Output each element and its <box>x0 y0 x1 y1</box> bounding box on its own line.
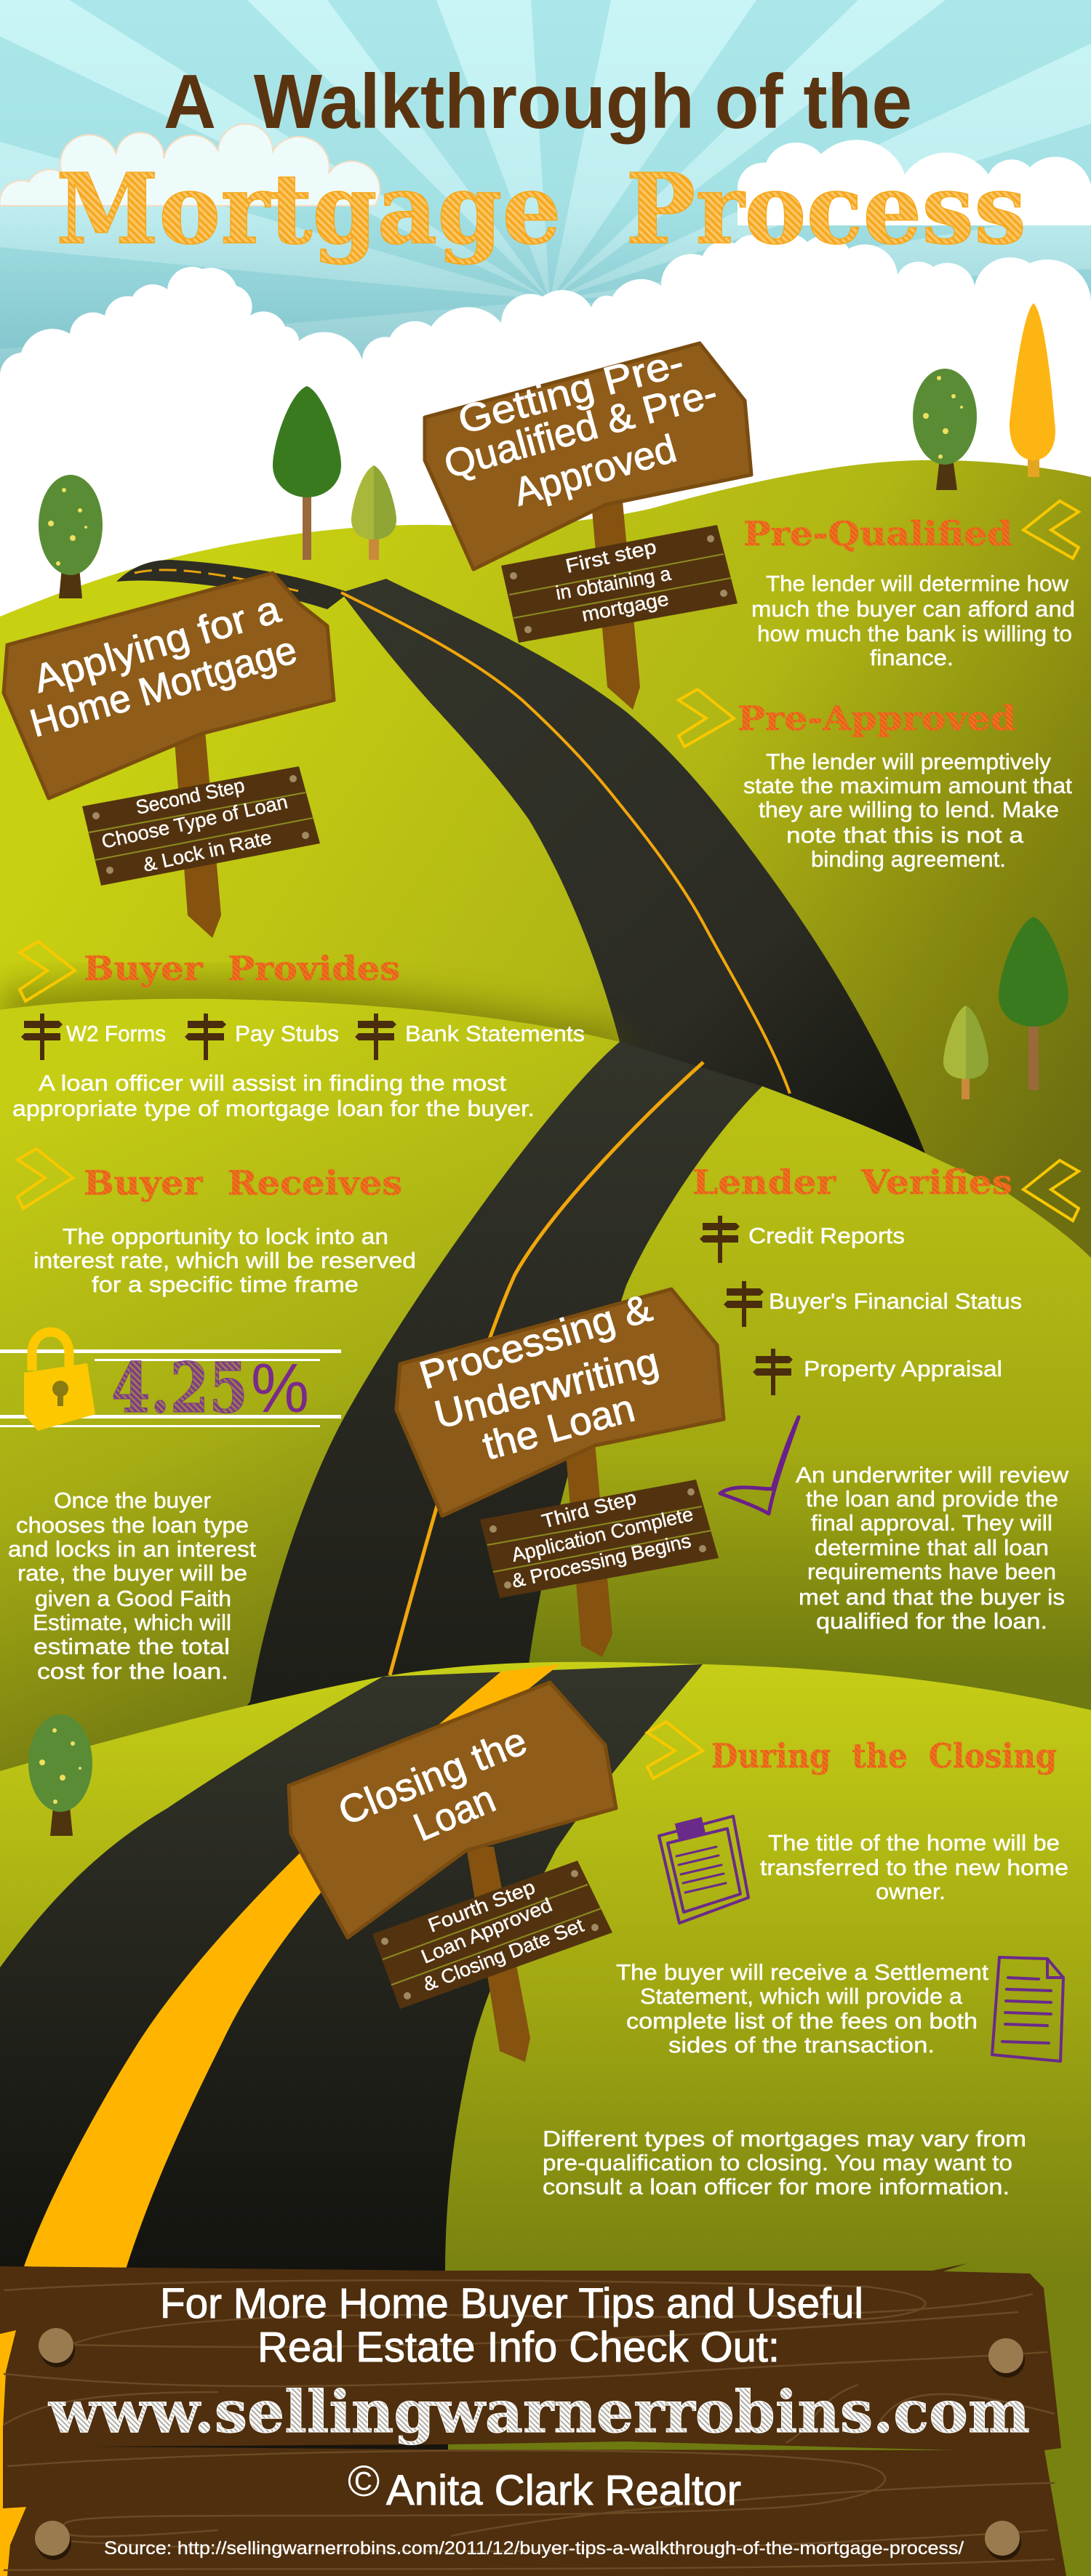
signpost: processing and underwriting: Processing & <box>415 1286 657 1397</box>
plank: second step <box>82 766 320 886</box>
chevron: lender verifies <box>1023 1160 1079 1221</box>
list: lender verifies items: Buyer's Financial Status <box>769 1288 1022 1314</box>
icon: purple check mark <box>720 1417 799 1514</box>
plank: second step: Second Step <box>134 774 247 819</box>
front clouds <box>0 234 1091 654</box>
text: buyer receives description: for a specific time frame <box>92 1272 359 1297</box>
heading: during the closing: During the Closing <box>711 1736 1057 1775</box>
signpost: getting pre-qualified <box>425 340 751 710</box>
text: once the buyer: rate, the buyer will be <box>17 1560 247 1586</box>
list: buyer provides items: Bank Statements <box>405 1021 585 1046</box>
text: loan officer: A loan officer will assist in finding the most <box>39 1070 506 1096</box>
footer wooden sign <box>0 2263 1066 2576</box>
chevron: during the closing <box>647 1722 703 1778</box>
rate lines <box>0 1349 341 1427</box>
icon: signpost w2 <box>21 1014 63 1060</box>
heading: buyer receives: Buyer Receives <box>84 1163 402 1203</box>
rate: 4.25%: % <box>251 1349 309 1427</box>
tree: light green small <box>351 465 396 560</box>
text: pre-qualified description: finance. <box>870 645 954 670</box>
text: underwriter description: requirements have been <box>807 1559 1056 1584</box>
text: title transferred: The title of the home will be <box>768 1830 1060 1855</box>
text: pre-approved description: state the maximum amount that <box>743 773 1072 798</box>
signpost: applying for a mortgage <box>4 573 334 938</box>
text: buyer receives description: interest rate, which will be reserved <box>33 1248 416 1273</box>
text: closing note <box>543 2126 1026 2199</box>
signpost: applying for a mortgage: Applying for a <box>28 587 286 702</box>
text: pre-approved description <box>743 749 1072 872</box>
nails <box>35 2328 1025 2560</box>
text: once the buyer: given a Good Faith <box>35 1586 231 1611</box>
signpost: processing and underwriting: Underwriting <box>430 1339 663 1437</box>
heading: pre-approved: Pre-Approved <box>738 699 1016 738</box>
signpost: applying for a mortgage: Home Mortgage <box>25 628 302 746</box>
icon: padlock <box>24 1332 95 1431</box>
text: underwriter description: the loan and provide the <box>806 1486 1058 1512</box>
text: pre-qualified description: much the buyer can afford and <box>751 596 1075 622</box>
far road section <box>116 560 349 609</box>
plank: fourth step: Fourth Step <box>425 1876 538 1937</box>
text: settlement statement: sides of the transaction. <box>668 2032 935 2058</box>
text: pre-approved description: note that this is not a <box>786 822 1024 848</box>
text: underwriter description: determine that all loan <box>815 1535 1049 1560</box>
list: buyer provides items <box>21 1014 585 1060</box>
signpost: processing and underwriting: the Loan <box>479 1387 639 1469</box>
icon: signpost credit <box>700 1216 740 1263</box>
title line one: A Walkthrough of the <box>164 59 912 145</box>
text: once the buyer: and locks in an interest <box>8 1536 256 1562</box>
text: pre-approved description: binding agreement. <box>811 846 1006 872</box>
signpost: getting pre-qualified: Approved <box>509 427 681 515</box>
text: settlement statement: The buyer will receive a Settlement <box>616 1959 988 1985</box>
text: underwriter description: final approval. They will <box>811 1510 1052 1536</box>
text: underwriter description: An underwriter will review <box>796 1462 1069 1488</box>
text: closing note: Different types of mortgages may vary from <box>543 2126 1026 2151</box>
chevron: pre-qualified <box>1023 501 1079 558</box>
text: once the buyer: estimate the total <box>33 1634 230 1659</box>
road first section <box>341 579 925 1153</box>
icon: signpost bank statements <box>355 1014 396 1060</box>
text: pre-qualified description <box>751 571 1075 670</box>
signpost: getting pre-qualified: Qualified & Pre- <box>439 371 722 487</box>
icon: signpost appraisal <box>753 1349 793 1395</box>
text: buyer receives description <box>33 1224 416 1297</box>
list: lender verifies items <box>700 1216 1022 1395</box>
signpost: closing the loan: Loan <box>407 1777 502 1850</box>
text: loan officer <box>12 1070 535 1121</box>
footer credit: Anita Clark Realtor <box>386 2467 741 2514</box>
text: pre-approved description: they are willing to lend. Make <box>759 797 1059 822</box>
text: closing note: pre-qualification to closing. You may want to <box>543 2150 1012 2175</box>
title line two: Mortgage Process <box>56 153 1026 266</box>
text: once the buyer: chooses the loan type <box>16 1512 249 1538</box>
road third section <box>0 1664 703 2271</box>
plank: third step: Application Complete <box>510 1503 695 1566</box>
plank: fourth step: Loan Approved <box>418 1894 555 1968</box>
footer source: Source: http://sellingwarnerrobins.com/2011/12/buyer-tips-a-walkthrough-of-the-mortgage-process/ <box>104 2538 964 2559</box>
plank: third step: & Processing Begins <box>510 1530 693 1592</box>
tree: dark green right <box>999 917 1068 1090</box>
footer website: www.sellingwarnerrobins.com <box>48 2378 1030 2446</box>
footer credit: © <box>348 2457 380 2505</box>
list: lender verifies items: Property Appraisal <box>804 1356 1002 1381</box>
text: settlement statement: complete list of the fees on both <box>626 2008 978 2034</box>
road second section <box>218 1042 762 1745</box>
tree: dotted green left <box>39 475 103 598</box>
signpost: closing the loan <box>289 1682 616 2062</box>
footer call to action <box>160 2280 863 2371</box>
list: lender verifies items: Credit Reports <box>748 1223 905 1248</box>
text: title transferred <box>760 1830 1068 1904</box>
middle hill left <box>0 999 620 1818</box>
icon: document <box>992 1957 1063 2061</box>
text: pre-approved description: The lender will preemptively <box>766 749 1052 774</box>
chevron: pre-approved <box>679 689 734 747</box>
plank: first step: First step <box>564 536 658 577</box>
icon: clipboard <box>659 1816 748 1923</box>
text: once the buyer <box>8 1488 256 1684</box>
foreground hill <box>0 1662 1091 2576</box>
text: settlement statement <box>616 1959 988 2058</box>
text: underwriter description <box>796 1462 1069 1634</box>
chevron: buyer receives <box>17 1149 73 1208</box>
plank: fourth step: & Closing Date Set <box>420 1914 587 1996</box>
text: underwriter description: qualified for the loan. <box>816 1608 1047 1634</box>
text: title transferred: owner. <box>876 1879 946 1904</box>
list: buyer provides items: Pay Stubs <box>235 1021 339 1046</box>
tree: tall yellow <box>1010 303 1055 477</box>
heading: buyer provides: Buyer Provides <box>84 949 400 988</box>
shadow above middle hill <box>0 980 626 1069</box>
text: pre-qualified description: The lender will determine how <box>766 571 1069 596</box>
back hill <box>0 460 1091 1309</box>
tree: dotted green right <box>913 369 977 490</box>
text: closing note: consult a loan officer for more information. <box>543 2174 1010 2199</box>
text: loan officer: appropriate type of mortgage loan for the buyer. <box>12 1096 535 1121</box>
heading: pre-qualified: Pre-Qualified <box>743 514 1012 553</box>
plank: third step: Third Step <box>540 1486 639 1533</box>
text: buyer receives description: The opportunity to lock into an <box>63 1224 388 1249</box>
chevron: buyer provides <box>20 942 75 1001</box>
footer call to action: For More Home Buyer Tips and Useful <box>160 2280 863 2327</box>
plank: third step <box>480 1480 719 1598</box>
text: once the buyer: Estimate, which will <box>33 1610 231 1635</box>
sky background with sun rays <box>0 0 1091 407</box>
back clouds <box>0 124 1091 225</box>
list: buyer provides items: W2 Forms <box>66 1021 166 1046</box>
text: underwriter description: met and that the buyer is <box>799 1584 1065 1610</box>
text: title transferred: transferred to the new home <box>760 1855 1068 1880</box>
plank: first step: mortgage <box>580 587 671 626</box>
tree: light green right <box>943 1006 988 1099</box>
icon: signpost financial <box>724 1281 764 1327</box>
plank: second step: Choose Type of Loan <box>100 791 289 853</box>
text: once the buyer: Once the buyer <box>54 1488 211 1513</box>
plank: fourth step <box>372 1861 612 2009</box>
plank: second step: & Lock in Rate <box>141 827 273 876</box>
icon: road stripe left edge <box>0 2330 26 2576</box>
plank: first step <box>501 525 738 643</box>
tree: tall dark green <box>273 386 341 560</box>
signpost: closing the loan: Closing the <box>332 1719 533 1834</box>
text: once the buyer: cost for the loan. <box>37 1658 228 1684</box>
middle hill right <box>524 1086 1091 1818</box>
icon: signpost pay stubs <box>185 1014 226 1060</box>
footer call to action: Real Estate Info Check Out: <box>257 2324 780 2371</box>
signpost: getting pre-qualified: Getting Pre- <box>454 340 688 443</box>
rate: 4.25%: 4.25 <box>111 1348 248 1429</box>
plank: first step: in obtaining a <box>554 562 674 604</box>
heading: lender verifies: Lender Verifies <box>692 1163 1012 1202</box>
signpost: processing and underwriting <box>396 1286 724 1657</box>
text: settlement statement: Statement, which will provide a <box>640 1983 963 2009</box>
tree: dotted green bottom left <box>28 1714 92 1836</box>
text: pre-qualified description: how much the bank is willing to <box>757 621 1072 646</box>
